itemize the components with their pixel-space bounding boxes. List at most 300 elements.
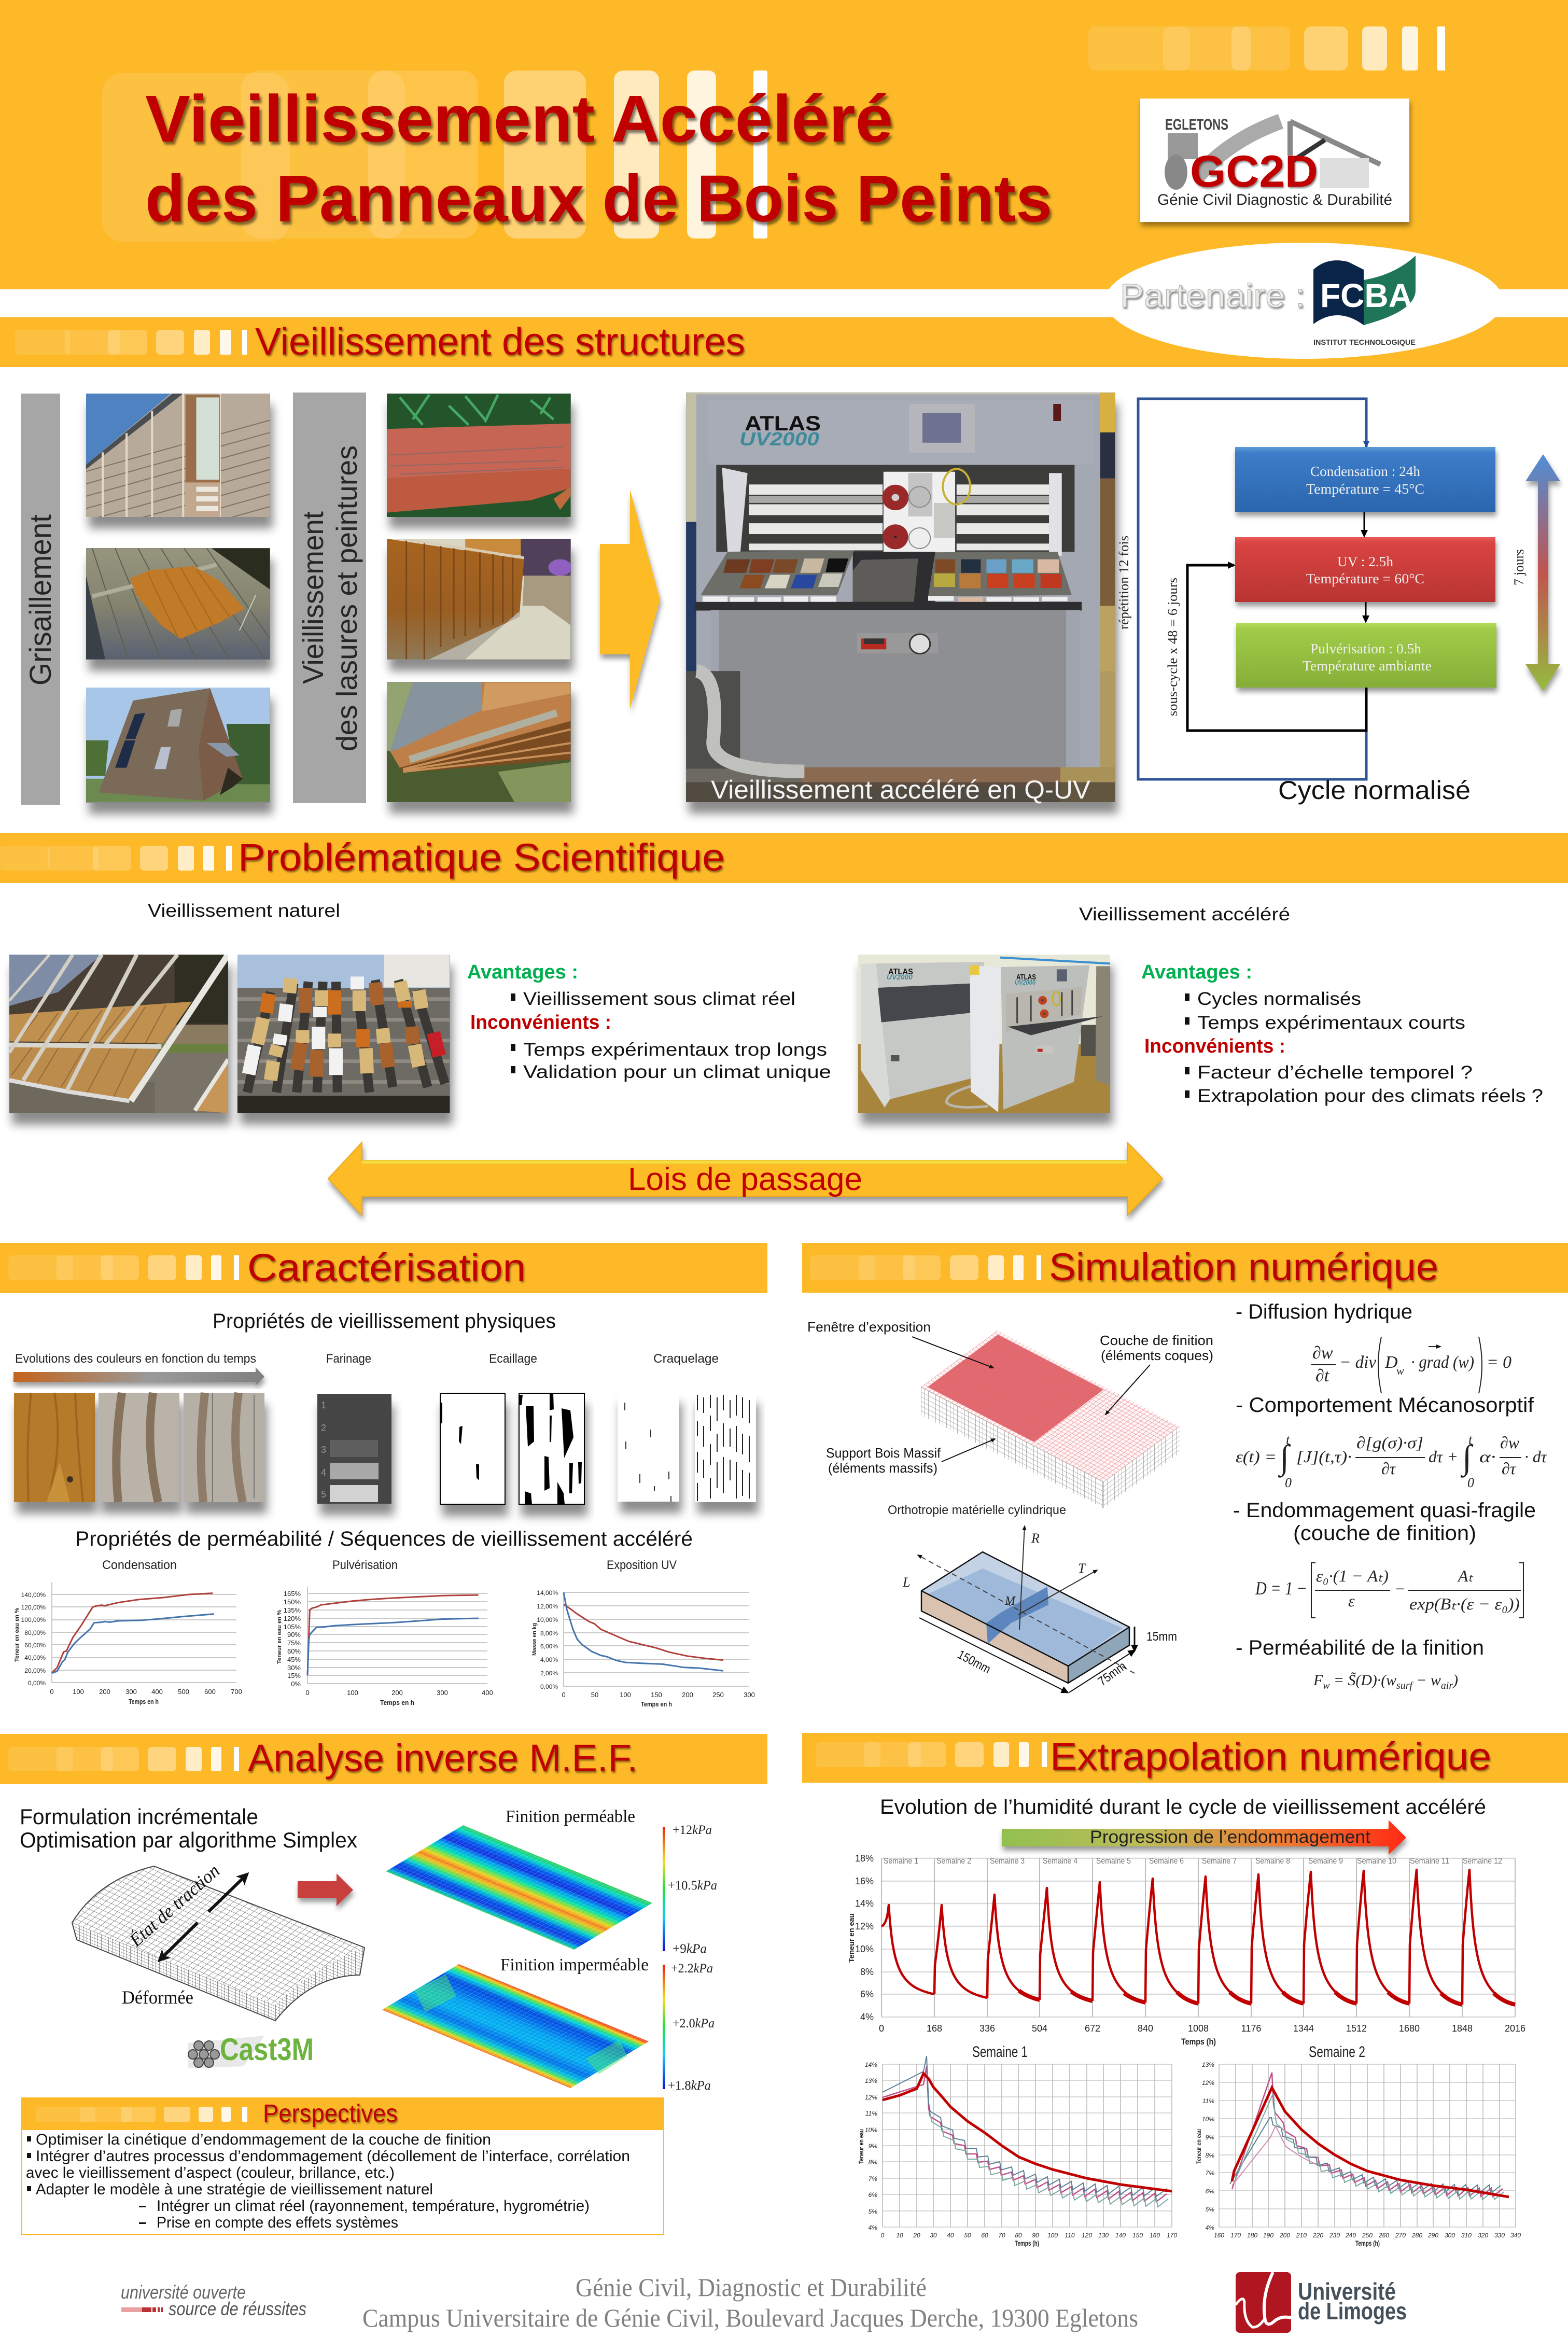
chart: semaine 2: 180 — [1247, 2232, 1257, 2239]
text block: adresse — [362, 2273, 1138, 2332]
label: partenaire: Partenaire : — [1120, 277, 1305, 314]
text block: naturel avantages: Vieillissement sous climat réel — [523, 989, 795, 1009]
chart: condensation: 400 — [151, 1688, 163, 1696]
heading: endommagement — [1233, 1499, 1536, 1545]
chart: pulverisation — [276, 1558, 493, 1706]
colour bar: impermeable: +2.2kPa — [671, 1962, 713, 1976]
label: finition permeable: Finition perméable — [506, 1807, 635, 1826]
heading: proprietes physiques: Propriétés de vieillissement physiques — [213, 1310, 556, 1333]
diagram: deformee: État de traction — [125, 1860, 223, 1951]
equation: mecanosorption: dτ + — [1429, 1447, 1458, 1466]
equation: mecanosorption: 0 — [1285, 1475, 1292, 1490]
chart: pulverisation: 120% — [284, 1615, 301, 1622]
chart: exposition UV: 10,00% — [537, 1616, 558, 1623]
chart: semaine 1: 150 — [1132, 2232, 1143, 2239]
colour bar: permeable: +12kPa — [673, 1823, 712, 1837]
heading: proprietes permeabilite: Propriétés de perméabilité / Séquences de vieillissement accéléré — [75, 1528, 693, 1550]
box: UV: UV : 2.5h — [1337, 554, 1394, 569]
chart: semaine 2: 260 — [1378, 2232, 1389, 2239]
chart: semaine 2: 12% — [1202, 2079, 1214, 2087]
image: craquelage fort — [695, 1392, 756, 1502]
chart: semaine 2: 7% — [1206, 2169, 1214, 2177]
image: farinage: 5 — [321, 1489, 326, 1500]
label: support bois massif — [826, 1439, 995, 1476]
chart: teneur en eau 12 semaines: Semaine 12 — [1463, 1857, 1502, 1866]
arrow: UV to pulverisation — [1365, 602, 1367, 622]
logo: GC2D — [1140, 99, 1409, 222]
chart: teneur en eau 12 semaines: Temps (h) — [1181, 2037, 1216, 2047]
chart: pulverisation: 150% — [284, 1598, 301, 1606]
logo: GC2D: GC2D — [1190, 147, 1318, 197]
equation: permeabilite: − w — [1412, 1672, 1441, 1689]
photo: enceinte ATLAS UV2000 — [686, 393, 1115, 804]
equation: diffusion: ∂w — [1312, 1343, 1333, 1363]
chart: semaine 2: 240 — [1345, 2232, 1356, 2239]
equation: mecanosorption: · dτ — [1524, 1447, 1548, 1466]
chart: pulverisation: 400 — [482, 1689, 493, 1697]
text block: formulation — [20, 1804, 357, 1852]
photo: facade grisee — [86, 394, 270, 570]
logo: universite ouverte: source de réussites — [169, 2298, 306, 2319]
colour bar: permeable — [663, 1823, 717, 1956]
arrow: vers cartes — [298, 1873, 353, 1906]
diagram: orthotropie: R — [1031, 1531, 1040, 1546]
chart: condensation: 140,00% — [21, 1591, 46, 1599]
panel: caracterisation — [0, 1243, 767, 1708]
chart: pulverisation: 30% — [287, 1664, 301, 1672]
chart: exposition UV: 8,00% — [540, 1630, 558, 1637]
chart: teneur en eau 12 semaines: 1512 — [1346, 2023, 1367, 2034]
section heading band — [802, 1243, 1568, 1293]
photo: enceintes UV: UV2000 — [887, 973, 913, 981]
label: vieillissement accelere: Vieillissement accéléré — [1079, 904, 1290, 925]
heading: endommagement: - Endommagement quasi-fragile — [1233, 1499, 1536, 1522]
equation: endommagement: − — [1394, 1579, 1406, 1598]
chart: pulverisation: Temps en h — [380, 1699, 414, 1706]
chart: exposition UV: 0 — [562, 1691, 566, 1699]
equation: diffusion: = 0 — [1487, 1353, 1511, 1372]
chart: semaine 2: 10% — [1202, 2116, 1214, 2123]
chart: exposition UV: 50 — [591, 1691, 598, 1699]
equation: mecanosorption — [1236, 1432, 1548, 1490]
equation: permeabilite: surf — [1396, 1680, 1413, 1691]
footer — [121, 2272, 1407, 2333]
chart: semaine 1: 20 — [913, 2232, 920, 2239]
colour bar: impermeable: +1.8kPa — [668, 2079, 711, 2093]
chart: semaine 1: 70 — [998, 2232, 1005, 2239]
chart: teneur en eau 12 semaines: 10% — [855, 1944, 874, 1954]
chart: semaine 1: 130 — [1098, 2232, 1109, 2239]
photo: bois neuf — [14, 1393, 95, 1502]
equation: endommagement: exp(Bₜ·(ε − ε₀)) — [1409, 1594, 1520, 1613]
equation: mecanosorption: [J](t,τ)· — [1296, 1447, 1352, 1466]
chart: semaine 1: 13% — [865, 2077, 877, 2084]
box: pulverisation: Température ambiante — [1303, 658, 1432, 674]
chart: teneur en eau 12 semaines: 18% — [855, 1853, 874, 1864]
chart: teneur en eau 12 semaines: 8% — [860, 1967, 874, 1977]
chart: exposition UV: 100 — [620, 1691, 631, 1699]
text block: naturel inconvenients: Validation pour un climat unique — [523, 1062, 831, 1082]
chart: semaine 2: 11% — [1202, 2097, 1214, 2105]
chart: semaine 1: 80 — [1015, 2232, 1022, 2239]
text block: formulation: Formulation incrémentale — [20, 1804, 258, 1829]
chart: semaine 2: 6% — [1206, 2188, 1214, 2195]
equation: mecanosorption: ∂τ — [1381, 1459, 1396, 1478]
chart: exposition UV: 12,00% — [537, 1603, 558, 1610]
section heading band: Extrapolation numérique — [1050, 1735, 1491, 1778]
label: craquelage: Craquelage — [653, 1352, 719, 1366]
colour map: finition permeable — [386, 1825, 652, 1950]
equation: diffusion: w — [1396, 1364, 1404, 1377]
chart: condensation: 200 — [99, 1688, 110, 1696]
photo: enceintes UV: UV2000 — [1015, 978, 1036, 986]
label: ecaillage: Ecaillage — [489, 1352, 537, 1366]
equation: mecanosorption: ∫ — [1278, 1438, 1291, 1478]
chart: semaine 2 — [1195, 2043, 1521, 2247]
chart: exposition UV: 2,00% — [540, 1670, 558, 1677]
chart: condensation: 120,00% — [21, 1604, 46, 1611]
image: ecaillage fort — [519, 1393, 584, 1504]
label: orthotropie: Orthotropie matérielle cylindrique — [888, 1503, 1066, 1517]
equation: diffusion: − div — [1339, 1353, 1377, 1372]
header banner — [0, 0, 1568, 289]
chart: teneur en eau 12 semaines: 336 — [979, 2023, 995, 2034]
photo: banc d'essai — [237, 955, 450, 1113]
chart: semaine 2: 320 — [1478, 2232, 1488, 2239]
chart: condensation: 0 — [50, 1688, 54, 1696]
label: deformee: Déformée — [122, 1987, 193, 2008]
text block: perspectives list: Prise en compte des effets systèmes — [157, 2214, 398, 2231]
partner badge — [1105, 243, 1503, 359]
equation: diffusion: ∂t — [1315, 1366, 1330, 1385]
diagram: maillage bloc — [921, 1331, 1180, 1508]
equation: mecanosorption: 0 — [1467, 1475, 1474, 1490]
equation: mecanosorption: ∂τ — [1502, 1459, 1517, 1478]
chart: teneur en eau 12 semaines: Semaine 7 — [1202, 1857, 1237, 1866]
diagram: orthotropie: 150mm — [955, 1647, 993, 1676]
cycle diagram — [1116, 399, 1560, 805]
chart: semaine 2: 160 — [1214, 2232, 1224, 2239]
text block: perspectives list: avec le vieillissement d’aspect (couleur, brillance, etc.) — [26, 2164, 395, 2181]
logo: FCBA: FCBA — [1320, 277, 1412, 314]
chart: semaine 1: 100 — [1047, 2232, 1058, 2239]
chart: semaine 2: Teneur en eau — [1195, 2129, 1202, 2164]
equation: mecanosorption: ε(t) = — [1236, 1447, 1277, 1466]
chart: semaine 1 — [858, 2043, 1177, 2247]
label: Vieillissement des lasures et peintures: Vieillissement — [297, 511, 329, 684]
chart: teneur en eau 12 semaines: 1008 — [1188, 2023, 1209, 2034]
heading: endommagement: (couche de finition) — [1293, 1522, 1476, 1545]
label: Grisaillement — [21, 394, 60, 805]
chart: condensation: 500 — [178, 1688, 189, 1696]
chart: semaine 2: 170 — [1230, 2232, 1241, 2239]
label: sous-cycle: sous-cycle x 48 = 6 jours — [1165, 578, 1180, 716]
equation: endommagement: ε — [1348, 1591, 1355, 1610]
chart: semaine 1: 11% — [865, 2110, 877, 2117]
section heading band — [0, 833, 1568, 883]
chart: semaine 2: 4% — [1206, 2224, 1214, 2231]
loop: 12 repetitions — [1138, 399, 1366, 779]
section heading band — [802, 1733, 1568, 1783]
image: farinage: 1 — [321, 1400, 326, 1410]
text block: perspectives list: Optimiser la cinétique d’endommagement de la couche de finition — [36, 2131, 491, 2148]
panel: problematique scientifique — [0, 833, 1568, 1215]
chart: semaine 2: 220 — [1312, 2232, 1323, 2239]
chart: condensation: Condensation — [102, 1558, 177, 1572]
diagram: orthotropie — [902, 1526, 1177, 1692]
label: fenetre d'exposition: Fenêtre d’exposition — [807, 1319, 931, 1335]
chart: condensation: 60,00% — [24, 1642, 46, 1649]
text block: accelere avantages: Avantages : — [1141, 961, 1252, 983]
label: fenetre d'exposition — [807, 1319, 993, 1368]
chart: teneur en eau 12 semaines: Semaine 1 — [884, 1857, 918, 1866]
chart: teneur en eau 12 semaines: 504 — [1032, 2023, 1047, 2034]
chart: semaine 1: 60 — [981, 2232, 988, 2239]
chart: exposition UV: 150 — [651, 1691, 662, 1699]
chart: semaine 2: 280 — [1411, 2232, 1422, 2239]
box: condensation: Température = 45°C — [1306, 481, 1424, 497]
box: condensation — [1235, 447, 1495, 512]
text block: naturel avantages: Avantages : — [467, 961, 578, 983]
chart: pulverisation: 105% — [284, 1623, 301, 1631]
chart: teneur en eau 12 semaines: Semaine 3 — [990, 1857, 1025, 1866]
chart: condensation: 100 — [73, 1688, 84, 1696]
heading: comportement mecanosorptif: - Comportement Mécanosorptif — [1236, 1394, 1534, 1417]
chart: semaine 2: 290 — [1427, 2232, 1438, 2239]
photo: enceintes UV — [858, 955, 1110, 1113]
chart: exposition UV: 0,00% — [540, 1683, 558, 1690]
section heading band — [0, 1243, 767, 1293]
label: vieillissement naturel: Vieillissement naturel — [148, 901, 340, 921]
photo: maison en bardeaux — [86, 688, 270, 803]
chart: pulverisation: 200 — [391, 1689, 403, 1697]
chart: exposition UV: 250 — [712, 1691, 724, 1699]
chart: semaine 2: 310 — [1461, 2232, 1472, 2239]
chart: semaine 2: 190 — [1263, 2232, 1273, 2239]
chart: semaine 1: Temps (h) — [1015, 2239, 1039, 2247]
chart: pulverisation: 60% — [287, 1647, 301, 1655]
text block: accelere inconvenients: Extrapolation pour des climats réels ? — [1197, 1086, 1543, 1106]
chart: teneur en eau 12 semaines: Semaine 10 — [1357, 1857, 1396, 1866]
section heading band: Caractérisation — [247, 1246, 526, 1289]
chart: semaine 1: 110 — [1065, 2232, 1075, 2239]
chart: teneur en eau 12 semaines: 12% — [855, 1921, 874, 1931]
chart: semaine 2: 270 — [1395, 2232, 1406, 2239]
equation: permeabilite: air — [1441, 1680, 1453, 1691]
chart: semaine 1: 9% — [869, 2143, 877, 2150]
chart: teneur en eau 12 semaines: Teneur en eau — [847, 1913, 856, 1963]
chart: pulverisation: 0% — [291, 1680, 301, 1688]
arrow: condensation to UV — [1364, 512, 1365, 536]
chart: teneur en eau 12 semaines: 672 — [1085, 2023, 1100, 2034]
title: Vieillissement Accéléré — [145, 82, 893, 156]
chart: semaine 1: 12% — [865, 2094, 877, 2101]
chart: teneur en eau 12 semaines: Semaine 6 — [1149, 1857, 1184, 1866]
chart: semaine 1: 120 — [1082, 2232, 1092, 2239]
box: UV: Température = 60°C — [1306, 571, 1424, 586]
chart: teneur en eau 12 semaines: Semaine 11 — [1410, 1857, 1449, 1866]
equation: diffusion — [1311, 1337, 1511, 1393]
chart: semaine 2: 13% — [1202, 2061, 1214, 2068]
chart: pulverisation: 100 — [347, 1689, 358, 1697]
chart: teneur en eau 12 semaines: Semaine 5 — [1096, 1857, 1131, 1866]
logo: Cast3M — [188, 2032, 314, 2068]
logo: FCBA — [1313, 256, 1416, 347]
chart: exposition UV: 200 — [682, 1691, 693, 1699]
photo: bois vieilli 2 — [184, 1393, 264, 1502]
chart: teneur en eau 12 semaines: Semaine 8 — [1255, 1857, 1290, 1866]
photo: panneaux exposes — [9, 955, 228, 1113]
chart: teneur en eau 12 semaines: 1344 — [1293, 2023, 1314, 2034]
chart: semaine 1: 7% — [869, 2175, 877, 2182]
image: farinage: 4 — [321, 1467, 326, 1478]
text block: adresse: Campus Universitaire de Génie Civil, Boulevard Jacques Derche, 19300 Egletons — [362, 2303, 1138, 2332]
caption: Vieillissement accéléré en Q-UV — [711, 775, 1091, 804]
equation: permeabilite: w — [1323, 1680, 1330, 1691]
chart: pulverisation: 45% — [287, 1656, 301, 1663]
chart: condensation: 0,00% — [28, 1679, 46, 1687]
diagram: orthotropie: T — [1078, 1561, 1086, 1576]
text block: perspectives list — [26, 2131, 630, 2231]
chart: exposition UV: 14,00% — [537, 1589, 558, 1597]
chart: semaine 2: 200 — [1279, 2232, 1290, 2239]
text block: accelere avantages: Temps expérimentaux courts — [1197, 1013, 1465, 1033]
text block: perspectives list: Adapter le modèle à une stratégie de vieillissement naturel — [36, 2181, 433, 2198]
chart: exposition UV — [531, 1558, 755, 1708]
arrow: sub-cycle return — [1187, 565, 1366, 731]
chart: teneur en eau 12 semaines: 4% — [860, 2012, 874, 2022]
colour bar: impermeable: +2.0kPa — [673, 2017, 715, 2031]
chart: condensation: 700 — [231, 1688, 242, 1696]
image: farinage: 2 — [321, 1423, 326, 1433]
diagram: orthotropie: M — [1004, 1594, 1016, 1608]
chart: teneur en eau 12 semaines: 6% — [860, 1989, 874, 1999]
equation: mecanosorption: ∂w — [1500, 1433, 1520, 1452]
text block: naturel inconvenients: Temps expérimentaux trop longs — [523, 1040, 827, 1060]
chart: teneur en eau 12 semaines: 1680 — [1399, 2023, 1420, 2034]
chart: pulverisation: 15% — [287, 1672, 301, 1679]
equation: diffusion: · grad (w) — [1411, 1353, 1474, 1372]
chart: semaine 2: 210 — [1296, 2232, 1307, 2239]
colour bar: impermeable — [663, 1962, 715, 2093]
chart: semaine 1: 8% — [869, 2159, 877, 2166]
logo: FCBA: INSTITUT TECHNOLOGIQUE — [1313, 338, 1416, 347]
photo: enceintes UV: ATLAS — [1016, 973, 1036, 982]
title — [145, 82, 1052, 236]
chart: exposition UV: Temps en h — [641, 1700, 672, 1708]
chart: semaine 1: 6% — [869, 2191, 877, 2199]
chart: semaine 1: 30 — [930, 2232, 937, 2239]
chart: teneur en eau 12 semaines: 840 — [1138, 2023, 1153, 2034]
colour bar: permeable: +9kPa — [673, 1942, 707, 1956]
arrow: evolution couleurs — [13, 1367, 264, 1385]
label: Grisaillement: Grisaillement — [24, 514, 58, 685]
chart: condensation: 20,00% — [24, 1667, 46, 1674]
diagram: orthotropie: 75mm — [1096, 1659, 1129, 1689]
photo: enceinte ATLAS UV2000: ATLAS — [745, 412, 821, 435]
image: farinage — [317, 1394, 391, 1504]
chart: semaine 2: Semaine 2 — [1309, 2043, 1365, 2061]
panel: vieillissement des structures — [0, 317, 1568, 805]
diagram: deformee — [72, 1860, 365, 2021]
section heading band: Simulation numérique — [1049, 1245, 1438, 1289]
panel: perspectives — [22, 2098, 664, 2234]
logo: Cast3M: Cast3M — [220, 2032, 314, 2067]
chart: teneur en eau 12 semaines: Semaine 9 — [1308, 1857, 1343, 1866]
equation: endommagement: Aₜ — [1457, 1566, 1474, 1585]
label: couche de finition: Couche de finition — [1100, 1333, 1213, 1348]
panel: simulation numerique — [802, 1243, 1568, 1692]
chart: pulverisation: 90% — [287, 1631, 301, 1639]
text block: accelere inconvenients — [1144, 1035, 1543, 1106]
photo: poutre rouge — [387, 394, 571, 517]
chart: pulverisation: 165% — [284, 1590, 301, 1598]
arrow: lois de passage — [328, 1142, 1163, 1215]
chart: semaine 2: 5% — [1206, 2206, 1214, 2213]
chart: semaine 1: 40 — [947, 2232, 954, 2239]
arrow: 7 days — [1525, 454, 1560, 691]
chart: condensation: 80,00% — [24, 1629, 46, 1636]
chart: pulverisation: 135% — [284, 1606, 301, 1614]
chart: condensation: Temps en h — [129, 1698, 159, 1705]
box: pulverisation — [1236, 623, 1496, 688]
text block: adresse: Génie Civil, Diagnostic et Durabilité — [576, 2273, 927, 2302]
arrow: progression endommagement — [1002, 1820, 1406, 1855]
title: des Panneaux de Bois Peints — [145, 162, 1052, 236]
label: Vieillissement des lasures et peintures — [293, 393, 366, 803]
chart: pulverisation: 75% — [287, 1639, 301, 1647]
photo: bardage lasure — [387, 539, 572, 660]
chart: teneur en eau 12 semaines: 1176 — [1241, 2023, 1261, 2034]
section heading band — [0, 317, 1568, 367]
label: couche de finition: (éléments coques) — [1101, 1348, 1213, 1363]
equation: diffusion: D — [1384, 1353, 1398, 1372]
heading: evolution humidite: Evolution de l’humidité durant le cycle de vieillissement accéléré — [880, 1796, 1486, 1818]
chart: semaine 1: 0 — [881, 2232, 885, 2239]
equation: mecanosorption: t — [1286, 1432, 1290, 1447]
chart: teneur en eau 12 semaines: 168 — [927, 2023, 942, 2034]
box: UV — [1235, 537, 1495, 602]
section heading band — [0, 1734, 767, 1784]
chart: teneur en eau 12 semaines — [847, 1853, 1525, 2047]
diagram: orthotropie: L — [902, 1575, 910, 1590]
label: cycle normalise: Cycle normalisé — [1278, 776, 1471, 805]
label: evolutions couleurs: Evolutions des couleurs en fonction du temps — [15, 1352, 256, 1366]
chart: exposition UV: Exposition UV — [607, 1558, 677, 1572]
equation: endommagement: D = 1 − — [1255, 1578, 1307, 1599]
label: support bois massif: Support Bois Massif — [826, 1445, 941, 1461]
text block: naturel inconvenients: Inconvénients : — [470, 1012, 611, 1033]
chart: pulverisation: 300 — [437, 1689, 448, 1697]
chart: pulverisation: 0 — [305, 1689, 310, 1697]
image: ecaillage faible — [440, 1393, 505, 1504]
chart: exposition UV: 4,00% — [540, 1656, 558, 1663]
arrow: lois de passage: Lois de passage — [628, 1161, 862, 1197]
label: finition impermeable: Finition imperméable — [500, 1955, 649, 1975]
chart: semaine 2: 330 — [1494, 2232, 1505, 2239]
chart: teneur en eau 12 semaines: 2016 — [1505, 2023, 1525, 2034]
chart: semaine 2: 230 — [1329, 2232, 1340, 2239]
heading: diffusion hydrique: - Diffusion hydrique — [1236, 1300, 1412, 1323]
chart: teneur en eau 12 semaines: 0 — [879, 2023, 884, 2034]
text block: formulation: Optimisation par algorithme Simplex — [20, 1828, 357, 1852]
equation: mecanosorption: t — [1468, 1432, 1473, 1447]
box: pulverisation: Pulvérisation : 0.5h — [1310, 641, 1421, 656]
text block: accelere inconvenients: Inconvénients : — [1144, 1035, 1285, 1057]
arrow: progression endommagement: Progression de l’endommagement — [1090, 1827, 1371, 1847]
chart: semaine 1: 10 — [896, 2232, 903, 2239]
label: farinage: Farinage — [326, 1352, 371, 1366]
